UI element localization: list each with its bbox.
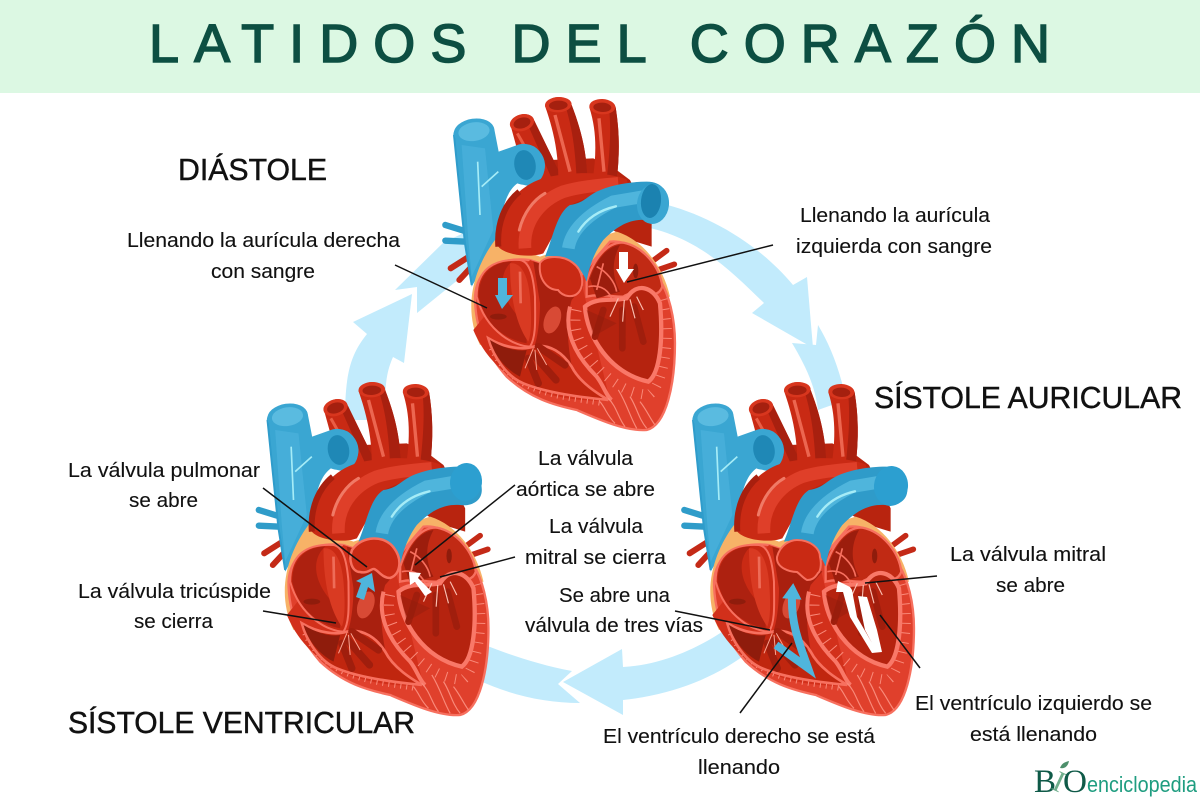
heading: diástole: DIÁSTOLE [178,152,327,187]
valve bump [540,257,582,296]
logo: bioenciclopedia: O [1063,764,1087,800]
text: aurícula izquierda: izquierda con sangre [796,235,992,258]
white flow arrow: left ventricle [836,581,882,653]
text: ventrículo derecho: llenando [698,756,780,779]
text: aurícula izquierda: Llenando la aurícula [800,204,991,227]
heart: sístole ventricular [259,381,488,715]
heart: sístole auricular [684,381,914,715]
text: ventrículo derecho: El ventrículo derecho se está [603,725,876,748]
text: válvula tricúspide: La válvula tricúspide [78,580,271,603]
logo: bioenciclopedia [1034,761,1198,800]
white arrow: left atrium filling [616,252,634,283]
text: válvula mitral se abre: La válvula mitral [950,543,1106,566]
title: LATIDOS DEL CORAZÓN [149,14,1050,74]
cycle arrows [345,203,846,715]
text: aurícula derecha: con sangre [211,260,315,283]
text: válvula aórtica: aórtica se abre [516,478,655,501]
logo: bioenciclopedia: I [1047,765,1070,799]
pulmonary artery opening [635,182,671,226]
white arrow: aortic flow [409,572,432,596]
text: válvula aórtica: La válvula [538,447,634,470]
text: válvula mitral se abre [950,543,1106,597]
text: válvula de tres vías: válvula de tres vías [525,614,703,637]
pulmonary artery end [872,464,910,508]
text: válvula pulmonar: La válvula pulmonar [68,459,260,482]
text: ventrículo izquierdo: está llenando [970,723,1097,746]
text: ventrículo izquierdo [915,692,1152,746]
pulmonary artery end [448,461,484,503]
text: aurícula derecha [127,229,401,283]
title banner [0,0,1200,93]
heading: sístole auricular: SÍSTOLE AURICULAR [874,380,1182,415]
valve bump [777,540,821,580]
blue arrow: right atrium filling [495,278,513,309]
logo: bioenciclopedia: B [1034,764,1056,800]
blue flow arrow: right ventricle [776,586,808,668]
text: válvula pulmonar: se abre [129,489,198,512]
blue arrow: pulmonary valve [356,573,375,600]
text: válvula mitral se cierra: mitral se cierra [525,546,667,569]
text: válvula aórtica [516,447,655,501]
leader lines [263,245,937,713]
text: aurícula izquierda [796,204,992,258]
text: aurícula derecha: Llenando la aurícula derecha [127,229,401,252]
text: válvula tricúspide [78,580,271,633]
text: ventrículo derecho [603,725,876,779]
open pulmonary valve [350,538,399,578]
text: válvula de tres vías [525,584,703,637]
text: válvula de tres vías: Se abre una [559,584,671,607]
heading: sístole ventricular: SÍSTOLE VENTRICULAR [68,705,415,740]
text: válvula mitral se abre: se abre [996,574,1065,597]
text: válvula pulmonar [68,459,260,512]
text: válvula tricúspide: se cierra [134,610,214,633]
text: válvula mitral se cierra [525,515,667,569]
text: válvula mitral se cierra: La válvula [549,515,644,538]
heart: diástole [445,96,675,430]
text: ventrículo izquierdo: El ventrículo izquierdo se [915,692,1152,715]
